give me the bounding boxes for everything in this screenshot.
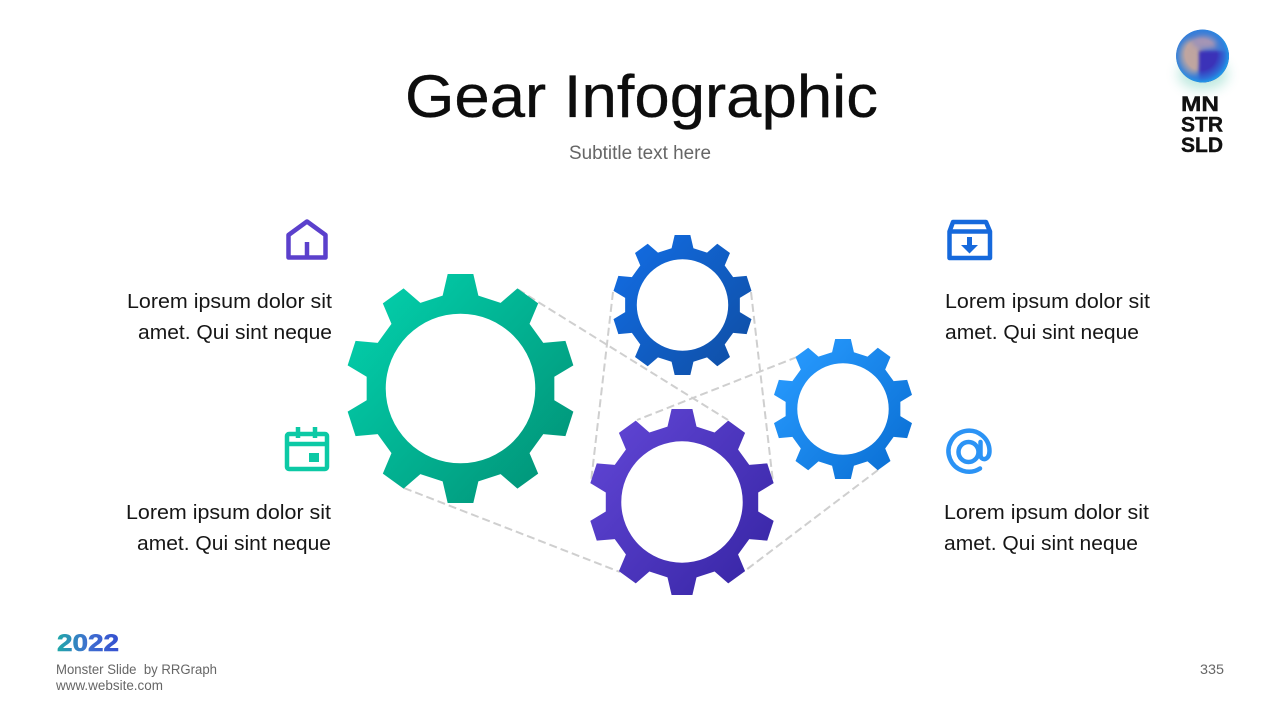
logo: MN STR SLD	[1176, 30, 1232, 157]
gear: large green	[348, 274, 573, 503]
logo: MN STR SLD: STR	[1181, 114, 1223, 136]
gear: bottom purple	[590, 409, 774, 595]
footer year: 2022	[57, 630, 119, 657]
text block: lower left	[126, 501, 331, 555]
text block: lower right	[944, 501, 1149, 555]
icon: house	[288, 222, 326, 258]
text block: lower right: Lorem ipsum dolor sit	[944, 501, 1149, 524]
text block: upper right: amet. Qui sint neque	[945, 321, 1139, 344]
text block: lower right: amet. Qui sint neque	[944, 532, 1138, 555]
text block: upper right	[945, 290, 1150, 344]
text block: lower left: Lorem ipsum dolor sit	[126, 501, 331, 524]
text block: upper left: Lorem ipsum dolor sit	[127, 290, 332, 313]
subtitle: Subtitle text here	[569, 143, 711, 164]
icon: archive box with arrow	[950, 222, 990, 258]
footer credit: Monster Slide by RRGraph	[56, 662, 217, 677]
icon: at sign	[949, 431, 990, 472]
logo: MN STR SLD: MN	[1181, 93, 1219, 116]
page number: 335	[1200, 662, 1224, 677]
dashed connector lines	[404, 290, 878, 572]
text block: upper right: Lorem ipsum dolor sit	[945, 290, 1150, 313]
text block: lower left: amet. Qui sint neque	[137, 532, 331, 555]
gear: top dark blue	[614, 235, 751, 375]
text block: upper left: amet. Qui sint neque	[138, 321, 332, 344]
icon: calendar	[287, 427, 327, 469]
logo: MN STR SLD: SLD	[1181, 134, 1223, 157]
gear: right light blue	[774, 339, 912, 479]
footer credit	[55, 662, 217, 693]
text block: upper left	[127, 290, 332, 344]
title: Gear Infographic	[405, 63, 878, 130]
footer credit: www.website.com	[55, 678, 163, 693]
